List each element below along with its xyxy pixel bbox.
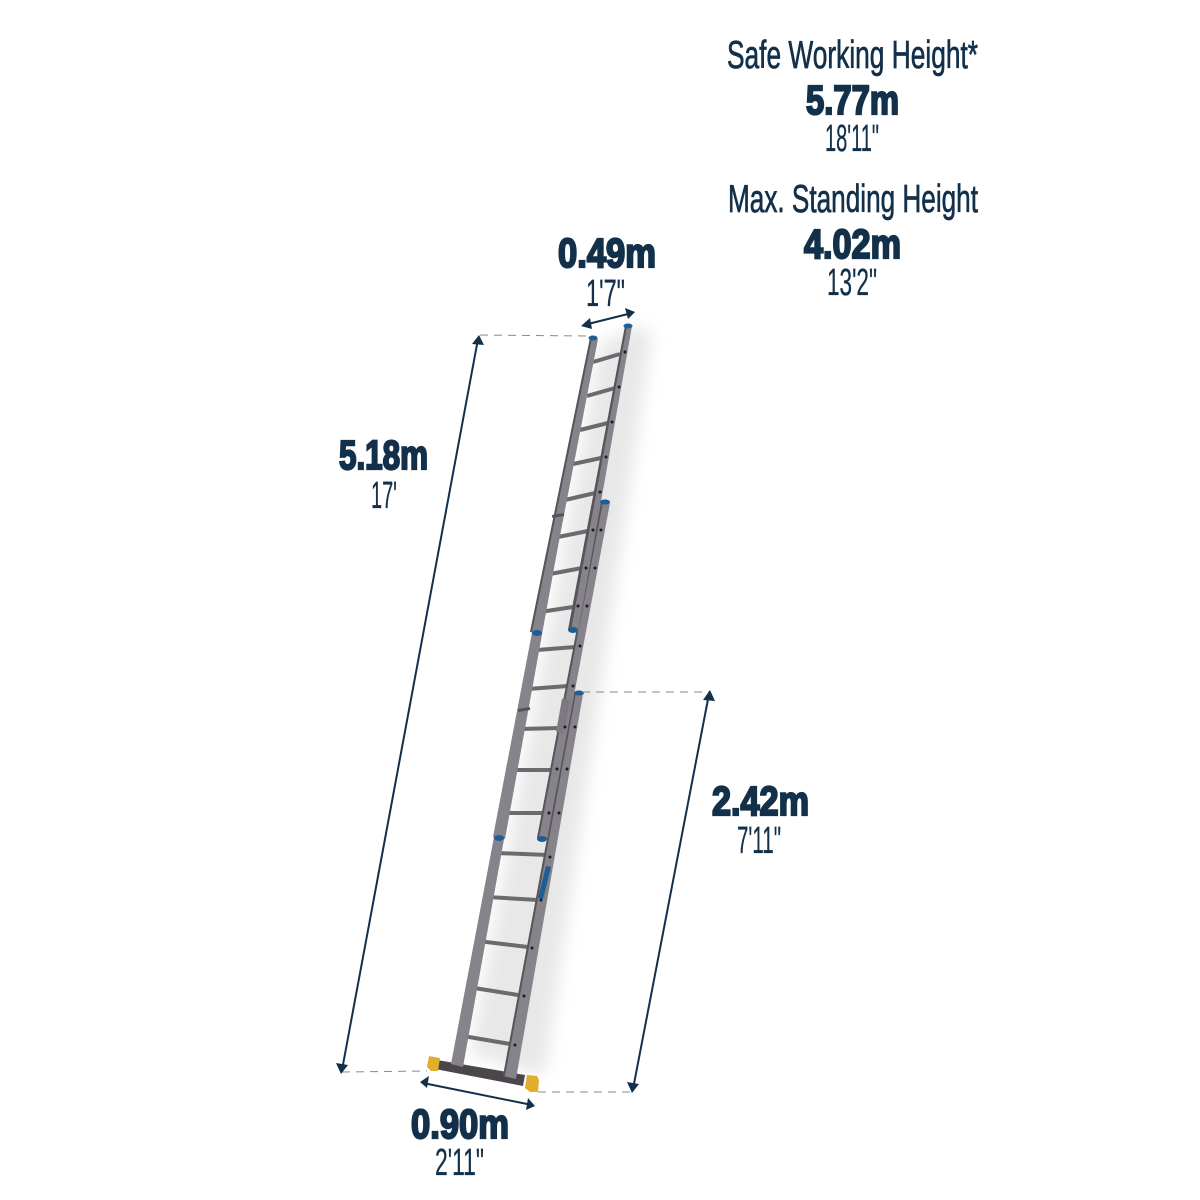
label: top width: 0.49m: [558, 230, 656, 276]
arrow: base width: [420, 1076, 535, 1110]
safe working height text block: 18'11": [825, 118, 879, 160]
yellow feet: [427, 1056, 539, 1092]
safe working height text block: Safe Working Height*: [727, 34, 978, 77]
max standing height text block: [728, 178, 978, 304]
stile brackets: [518, 513, 570, 733]
label: overall length: [339, 432, 428, 517]
arrow: overall length: [336, 335, 484, 1074]
arrow: top width: [581, 308, 635, 329]
base stabiliser bar: [435, 1060, 525, 1086]
label: overall length: 17': [371, 475, 397, 517]
label: base width: 2'11": [435, 1142, 484, 1184]
blue stile caps: [494, 324, 632, 842]
bottom section stiles: [451, 693, 583, 1079]
middle section stiles: [493, 502, 610, 840]
safe working height text block: 5.77m: [806, 77, 899, 123]
label: overall length: 5.18m: [339, 432, 428, 478]
label: top width: 1'7": [586, 273, 625, 315]
blue brand label: [538, 866, 551, 899]
max standing height text block: Max. Standing Height: [728, 178, 978, 221]
max standing height text block: 13'2": [827, 262, 877, 304]
max standing height text block: 4.02m: [804, 221, 901, 267]
label: closed length: [712, 778, 809, 862]
ladder illustration: [427, 324, 652, 1092]
stile rivets: [514, 350, 626, 1046]
safe working height text block: [727, 34, 978, 160]
arrow: closed length: [627, 690, 715, 1093]
label: closed length: 2.42m: [712, 778, 809, 824]
top section stiles: [530, 326, 632, 634]
ladder rungs: [463, 354, 620, 1044]
label: base width: 0.90m: [411, 1101, 509, 1147]
label: top width: [558, 230, 656, 315]
label: closed length: 7'11": [737, 820, 781, 862]
label: base width: [411, 1101, 509, 1184]
dashed guide lines: [342, 335, 709, 1092]
